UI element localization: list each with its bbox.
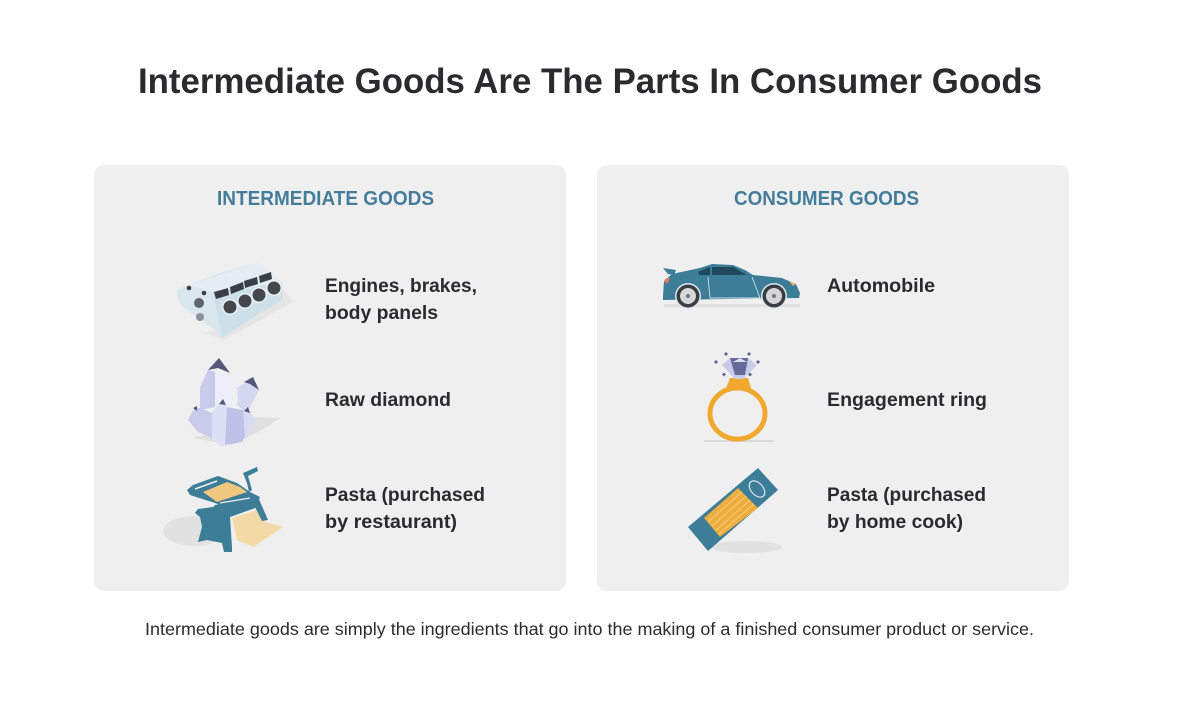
text: raw diamond: Raw diamond bbox=[325, 390, 451, 411]
text: engines, brakes, body panels: Engines, brakes, bbox=[325, 276, 477, 297]
footer text: Intermediate goods are simply the ingredients that go into the making of a finished consumer product or service. bbox=[145, 619, 1034, 639]
text: engines, brakes, body panels bbox=[325, 276, 477, 324]
heading: consumer goods: CONSUMER GOODS bbox=[734, 188, 919, 210]
heading: intermediate goods: INTERMEDIATE GOODS bbox=[217, 188, 434, 210]
icon: car bbox=[663, 264, 800, 309]
panel: intermediate goods bbox=[94, 165, 566, 591]
text: engagement ring: Engagement ring bbox=[827, 390, 987, 411]
text: pasta purchased by home cook: by home cook) bbox=[827, 512, 963, 533]
icon: raw diamond bbox=[188, 358, 280, 447]
text: pasta purchased by restaurant: by restaurant) bbox=[325, 512, 457, 533]
text: pasta purchased by home cook: Pasta (purchased bbox=[827, 485, 986, 506]
text: pasta purchased by restaurant: Pasta (purchased bbox=[325, 485, 485, 506]
icon: engagement ring bbox=[704, 352, 773, 442]
icon: engine block bbox=[177, 263, 293, 340]
icon: pasta machine bbox=[163, 467, 283, 552]
panel: consumer goods bbox=[597, 165, 1069, 591]
icon: pasta box bbox=[688, 468, 782, 553]
text: pasta purchased by restaurant bbox=[325, 485, 485, 533]
title: Intermediate Goods Are The Parts In Consumer Goods bbox=[138, 62, 1042, 101]
text: pasta purchased by home cook bbox=[827, 485, 986, 533]
text: engines, brakes, body panels: body panels bbox=[325, 303, 438, 324]
text: automobile: Automobile bbox=[827, 276, 935, 297]
